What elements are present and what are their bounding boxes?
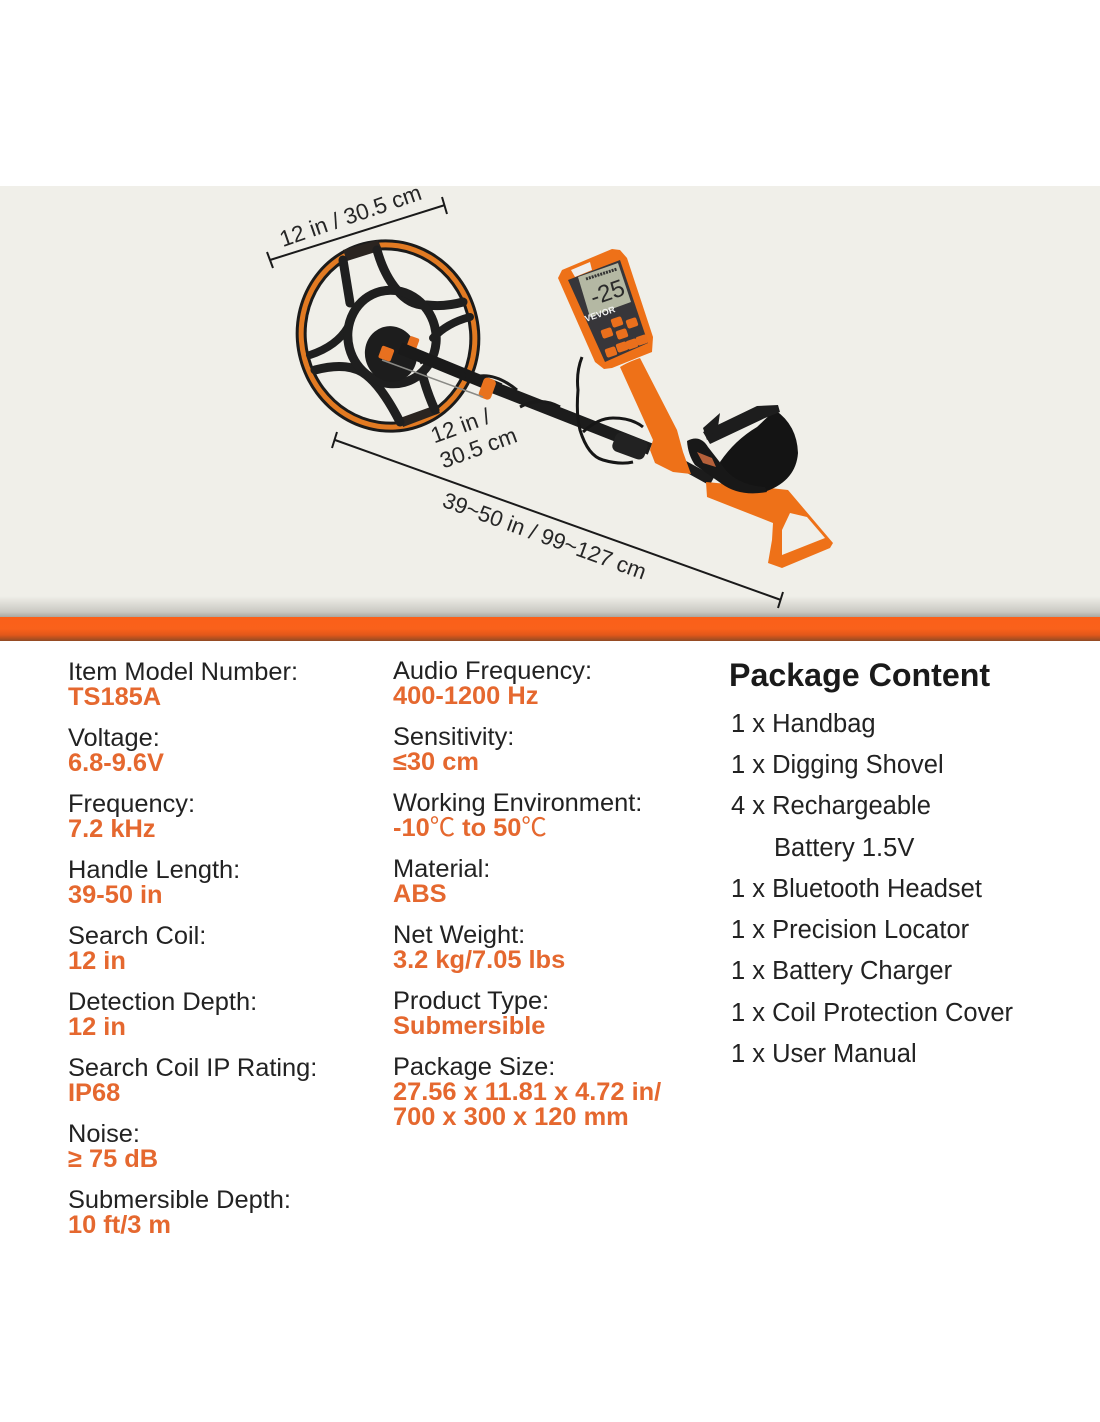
- icon: handle: [620, 358, 691, 474]
- spec: audio frequency: [393, 657, 592, 710]
- spec: search coil: [68, 922, 206, 975]
- specifications column 2: 400-1200 Hz: [393, 682, 538, 710]
- specifications column 1: Handle Length:: [68, 856, 240, 884]
- specifications column 2: Submersible: [393, 1012, 545, 1040]
- specifications column 2: ABS: [393, 880, 447, 908]
- icon: search coil: [274, 218, 502, 454]
- specifications column 1: 12 in: [68, 1013, 126, 1041]
- specifications column 1: 10 ft/3 m: [68, 1211, 171, 1239]
- orange divider band: [0, 617, 1100, 641]
- specifications column 2: Product Type:: [393, 987, 549, 1015]
- package content list: 4 x Rechargeable: [731, 792, 931, 820]
- dimension: coil radius: 30.5 cm: [437, 423, 520, 473]
- spec: package size: [393, 1053, 661, 1131]
- specifications column 1: IP68: [68, 1079, 120, 1107]
- dimension: length: [332, 432, 783, 608]
- icon: control console: VEVOR: [583, 304, 617, 324]
- specifications column 2: [393, 657, 661, 1131]
- spec: product type: [393, 987, 549, 1040]
- dimension: coil diameter: 12 in / 30.5 cm: [276, 180, 425, 252]
- dimension: length: 39~50 in / 99~127 cm: [439, 488, 650, 584]
- package content list: 1 x Battery Charger: [731, 957, 952, 985]
- spec: voltage: [68, 724, 164, 777]
- specifications column 1: ≥ 75 dB: [68, 1145, 158, 1173]
- spec: noise: [68, 1120, 158, 1173]
- specifications column 2: ≤30 cm: [393, 748, 479, 776]
- specifications column 1: [68, 658, 317, 1239]
- spec: material: [393, 855, 490, 908]
- product photo panel: [0, 186, 1100, 617]
- specifications column 2: Net Weight:: [393, 921, 525, 949]
- specifications column 2: Material:: [393, 855, 490, 883]
- specifications column 2: Package Size:: [393, 1053, 555, 1081]
- heading: package content: Package Content: [729, 657, 990, 693]
- spec: IP rating: [68, 1054, 317, 1107]
- specifications column 1: Search Coil:: [68, 922, 206, 950]
- specifications column 2: 27.56 x 11.81 x 4.72 in/: [393, 1078, 661, 1106]
- dimension: coil radius: 12 in /: [427, 403, 494, 448]
- specifications column 2: 3.2 kg/7.05 lbs: [393, 946, 565, 974]
- specifications column 1: 6.8-9.6V: [68, 749, 164, 777]
- package content list: 1 x Digging Shovel: [731, 751, 944, 779]
- specifications column 2: 700 x 300 x 120 mm: [393, 1103, 629, 1131]
- specifications column 2: -10℃ to 50℃: [393, 814, 547, 842]
- spec: submersible depth: [68, 1186, 291, 1239]
- specifications column 1: Submersible Depth:: [68, 1186, 291, 1214]
- package content list: 1 x Coil Protection Cover: [731, 999, 1013, 1027]
- icon: shaft and cable: [382, 348, 712, 481]
- specifications column 1: TS185A: [68, 683, 161, 711]
- package content list: 1 x Bluetooth Headset: [731, 875, 982, 903]
- specifications column 1: Item Model Number:: [68, 658, 298, 686]
- package content list: [731, 710, 1013, 1068]
- package content list: Battery 1.5V: [774, 834, 914, 862]
- spec: handle length: [68, 856, 240, 909]
- icon: arm cuff and rest: [687, 405, 833, 568]
- specifications column 2: Audio Frequency:: [393, 657, 592, 685]
- specifications column 1: 39-50 in: [68, 881, 163, 909]
- specifications column 1: Frequency:: [68, 790, 195, 818]
- specifications column 1: Detection Depth:: [68, 988, 257, 1016]
- specifications column 2: Working Environment:: [393, 789, 642, 817]
- specifications column 1: Voltage:: [68, 724, 160, 752]
- icon: control console: [558, 249, 653, 369]
- specifications column 1: 12 in: [68, 947, 126, 975]
- spec: model: [68, 658, 298, 711]
- dimension: coil diameter: [267, 180, 447, 268]
- specifications column 1: 7.2 kHz: [68, 815, 156, 843]
- spec: detection depth: [68, 988, 257, 1041]
- package content list: 1 x Precision Locator: [731, 916, 969, 944]
- specifications column 1: Noise:: [68, 1120, 140, 1148]
- specifications column 2: Sensitivity:: [393, 723, 514, 751]
- metal detector illustration: [266, 180, 833, 608]
- dimension: coil radius: [427, 403, 520, 473]
- spec: frequency: [68, 790, 195, 843]
- package content list: 1 x User Manual: [731, 1040, 917, 1068]
- package content list: 1 x Handbag: [731, 710, 876, 738]
- spec: sensitivity: [393, 723, 514, 776]
- icon: control console: -25: [587, 274, 628, 311]
- spec: working environment: [393, 789, 642, 842]
- specifications column 1: Search Coil IP Rating:: [68, 1054, 317, 1082]
- spec: net weight: [393, 921, 565, 974]
